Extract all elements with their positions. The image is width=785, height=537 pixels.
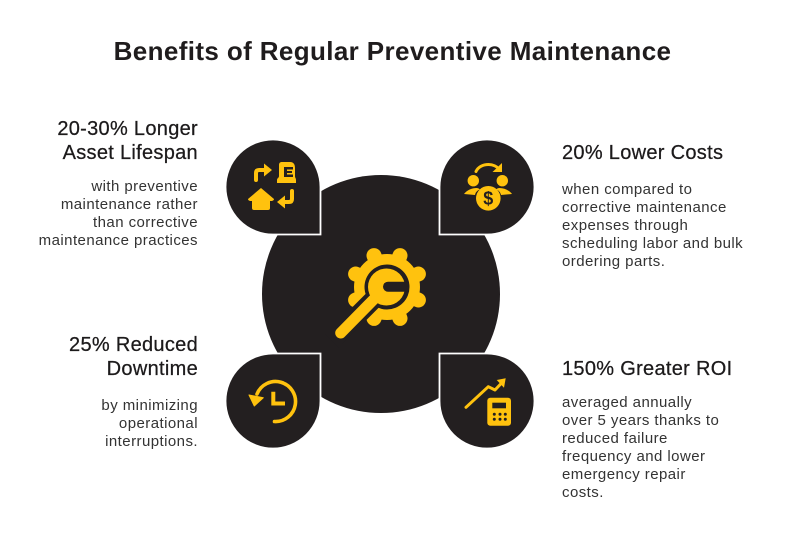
heading: 150% greater ROI: 150% Greater ROI (562, 358, 732, 380)
text: lifespan description (39, 178, 198, 249)
text: ROI description: averaged annually (562, 394, 692, 411)
icon: growth arrow and calculator (466, 378, 511, 426)
icon: clock with back arrow (249, 382, 296, 422)
text: ROI description: frequency and lower (562, 448, 705, 465)
text: ROI description: over 5 years thanks to (562, 412, 719, 429)
text: dollar sign in coin: $ (483, 188, 493, 208)
text: lifespan description: maintenance rather (61, 196, 198, 213)
text: downtime description: interruptions. (105, 433, 198, 450)
heading: 25% reduced downtime: 25% Reduced (69, 334, 198, 356)
heading: 20-30% longer asset lifespan (57, 118, 198, 164)
heading: 20-30% longer asset lifespan: Asset Lifespan (63, 142, 198, 164)
text: costs description: ordering parts. (562, 253, 665, 270)
panel: bottom-left drop (226, 354, 320, 448)
text: downtime description: by minimizing (101, 397, 198, 414)
title: Benefits of Regular Preventive Maintenance (114, 36, 671, 66)
central circle (262, 175, 500, 413)
icon: asset lifecycle (248, 162, 296, 210)
text: lifespan description: than corrective (93, 214, 198, 231)
heading: 25% reduced downtime: Downtime (107, 358, 198, 380)
text: ROI description (562, 394, 719, 501)
text: lifespan description: with preventive (91, 178, 198, 195)
panel: top-left drop (226, 140, 320, 234)
text: costs description: expenses through (562, 217, 688, 234)
text: ROI description: costs. (562, 484, 604, 501)
panel: bottom-right drop (440, 354, 534, 448)
text: downtime description: operational (119, 415, 198, 432)
heading: 20% lower costs: 20% Lower Costs (562, 142, 723, 164)
text: costs description (562, 181, 743, 270)
text: downtime description (101, 397, 198, 450)
text: ROI description: reduced failure (562, 430, 668, 447)
text: costs description: scheduling labor and bulk (562, 235, 743, 252)
text: ROI description: emergency repair (562, 466, 686, 483)
heading: 25% reduced downtime (69, 334, 198, 380)
text: costs description: when compared to (562, 181, 692, 198)
icon: people and dollar coin (464, 163, 512, 211)
text: lifespan description: maintenance practices (39, 232, 198, 249)
heading: 20-30% longer asset lifespan: 20-30% Longer (57, 118, 198, 140)
icon: gear and wrench (332, 254, 420, 341)
text: costs description: corrective maintenance (562, 199, 727, 216)
panel: top-right drop (440, 140, 534, 234)
